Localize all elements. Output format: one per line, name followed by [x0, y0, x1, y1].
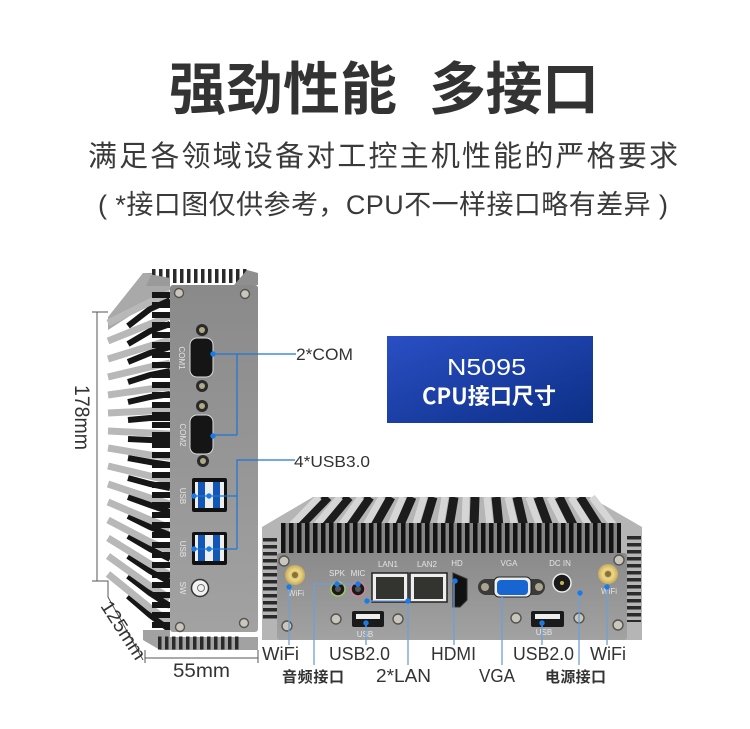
label: 2*COM: 2*COM	[296, 345, 353, 364]
USB2.0 port left	[352, 611, 384, 639]
rotated port labels	[177, 346, 187, 595]
right device: rear view	[262, 494, 642, 640]
title: 多接口	[429, 44, 599, 126]
HDMI port	[451, 559, 467, 607]
LAN2 port	[410, 560, 447, 602]
USB2.0 port left: USB	[357, 630, 373, 639]
port name labels: HDMI	[431, 644, 476, 664]
audio jacks	[329, 569, 366, 596]
title	[169, 44, 599, 126]
top fins highlights	[290, 497, 615, 527]
callout lines: side ports	[191, 351, 296, 552]
LAN2 port: LAN2	[417, 560, 438, 569]
panel screws	[279, 555, 624, 631]
COM2 port	[190, 400, 213, 467]
dimension: width: 55mm	[173, 661, 230, 682]
power button	[192, 580, 208, 596]
dimension: height: 178mm	[70, 385, 93, 450]
top fins	[152, 269, 248, 283]
audio jacks: MIC	[351, 569, 366, 578]
label: 4*USB3.0: 4*USB3.0	[294, 454, 370, 471]
top chamfer	[108, 273, 170, 330]
subtitle: 满足各领域设备对工控主机性能的严格要求	[88, 133, 678, 175]
DC power jack: DC IN	[549, 559, 571, 568]
VGA port: VGA	[501, 559, 518, 568]
top fins black shadows	[299, 497, 599, 527]
rear face panel	[277, 553, 627, 640]
port name labels: VGA	[479, 666, 515, 686]
port name labels: USB2.0	[329, 644, 390, 664]
white gaps at fin tips	[262, 494, 592, 497]
USB3.0 port upper	[192, 478, 227, 512]
WiFi antenna right: WiFi	[601, 587, 617, 596]
WiFi antenna right	[598, 564, 618, 596]
LAN1 port	[372, 560, 408, 602]
chassis	[262, 497, 642, 640]
right side fins	[627, 536, 641, 622]
VGA port	[478, 559, 545, 597]
rotated port labels: USB	[178, 488, 187, 504]
WiFi antenna left: WiFi	[288, 589, 304, 598]
vertical fin teeth	[281, 523, 621, 553]
port name labels: USB2.0	[513, 644, 574, 664]
USB2.0 port right: USB	[536, 628, 552, 637]
USB3.0 port lower	[192, 532, 227, 565]
panel screws	[174, 288, 250, 632]
rotated port labels: COM2	[178, 423, 187, 447]
HDMI port: HD	[451, 559, 463, 568]
left side fins	[263, 538, 277, 622]
port name labels: WiFi	[590, 644, 626, 664]
bottom corner	[143, 630, 258, 650]
port name labels: WiFi	[262, 644, 299, 664]
left device: side view	[108, 270, 258, 650]
USB2.0 port right	[531, 611, 564, 637]
spec badge	[387, 336, 593, 423]
DC power jack	[549, 559, 571, 592]
title: 强劲性能	[169, 44, 397, 126]
dimension: depth: 125mm	[96, 597, 149, 664]
audio jacks: SPK	[329, 569, 346, 578]
WiFi antenna left	[285, 565, 305, 598]
LAN1 port: LAN1	[378, 560, 399, 569]
port name labels: 2*LAN	[376, 666, 431, 686]
spec badge: CPU接口尺寸	[422, 379, 556, 411]
port name labels: 电源接口	[545, 666, 606, 687]
port name labels: 音频接口	[282, 666, 344, 687]
side fins: metal layer	[108, 293, 170, 622]
bottom fins	[158, 636, 240, 650]
fin roots beside the panel	[152, 292, 170, 632]
dimension lines	[92, 312, 258, 663]
rotated port labels: COM1	[177, 346, 186, 370]
side fins: shadow layer	[128, 300, 170, 630]
rotated port labels: SW	[178, 582, 187, 595]
note: interface differences: ( *接口图仅供参考，CPU不一样接口略有差异 )	[98, 190, 668, 220]
side face panel	[170, 285, 258, 632]
rotated port labels: USB	[178, 541, 187, 557]
spec badge: N5095	[447, 354, 526, 380]
port name labels	[262, 644, 626, 687]
callout lines: rear ports	[286, 578, 610, 665]
COM1 port	[190, 324, 213, 392]
